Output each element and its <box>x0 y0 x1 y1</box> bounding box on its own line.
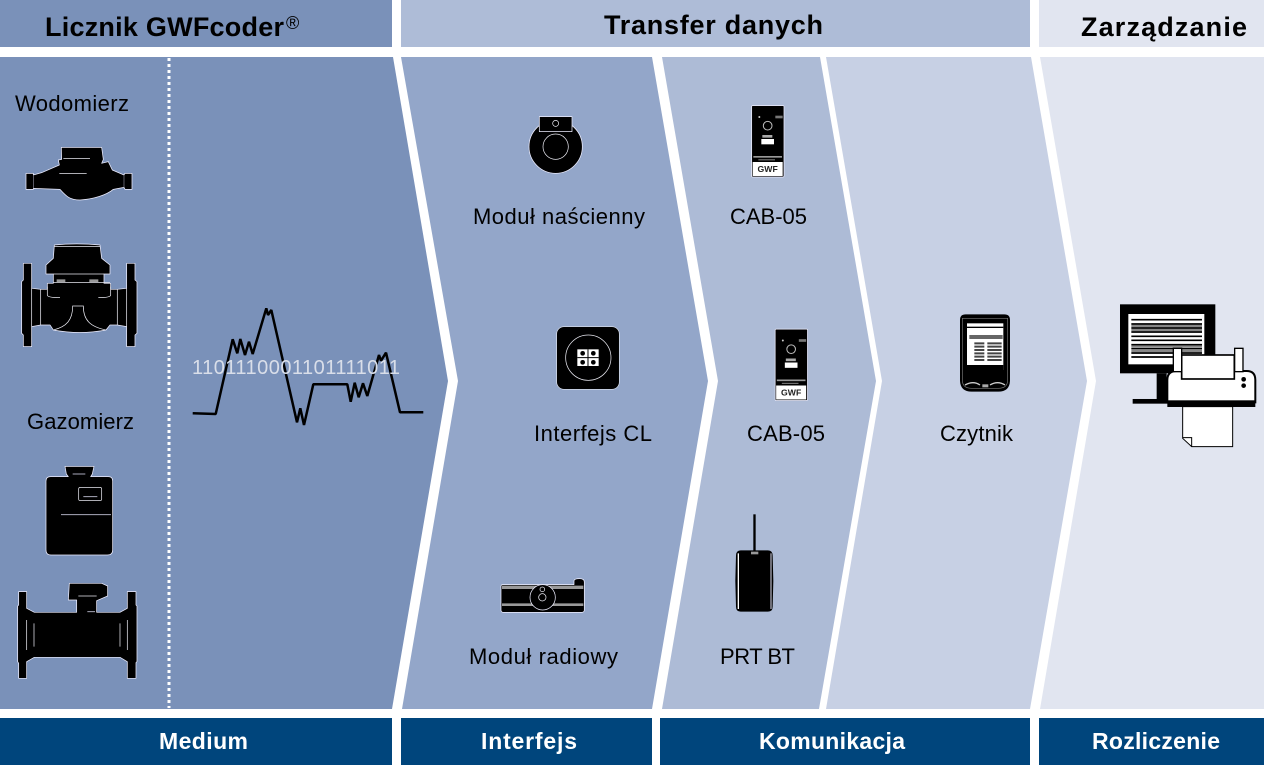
label: Interfejs CL: Interfejs CL <box>534 421 652 446</box>
header: Licznik GWFcoder: Licznik GWFcoder <box>45 12 284 42</box>
panel: medium chevron <box>0 57 448 709</box>
icon: large water meter <box>22 244 137 347</box>
icon: small water meter <box>26 147 132 200</box>
label: Moduł radiowy: Moduł radiowy <box>469 644 618 669</box>
header: Zarządzanie <box>1039 0 1264 47</box>
icon: monitor <box>1120 304 1215 404</box>
icon: CAB-05 top <box>752 106 784 177</box>
header: Licznik GWFcoder <box>0 0 392 47</box>
footer: Komunikacja <box>660 718 1030 765</box>
panel: billing chevron <box>1040 57 1264 709</box>
icon: turbine gas meter <box>18 583 137 678</box>
footer: Rozliczenie <box>1039 718 1264 765</box>
chart: digital signal line <box>193 308 423 425</box>
header: Zarządzanie: Zarządzanie <box>1081 12 1247 42</box>
panel: interface chevron <box>401 57 708 709</box>
footer: Interfejs: Interfejs <box>481 728 577 754</box>
header: Licznik GWFcoder: ® <box>286 13 299 33</box>
icon: CAB-05 top: GWF <box>758 164 778 174</box>
label: CAB-05 middle: CAB-05 <box>747 421 825 446</box>
label: Gazomierz: Gazomierz <box>27 409 134 434</box>
header: Transfer danych: Transfer danych <box>604 10 823 40</box>
icon: printer <box>1167 348 1255 447</box>
label: PRT BT: PRT BT <box>720 644 795 669</box>
icon: CAB-05 middle <box>775 329 807 400</box>
label: Czytnik: Czytnik <box>940 421 1014 446</box>
label: CAB-05 top: CAB-05 <box>730 204 807 229</box>
footer: Interfejs <box>401 718 652 765</box>
panel: reader chevron <box>826 57 1087 709</box>
icon: CAB-05 middle: GWF <box>781 387 801 397</box>
footer: Rozliczenie: Rozliczenie <box>1092 728 1220 754</box>
icon: radio module <box>501 579 584 612</box>
label: Moduł naścienny: Moduł naścienny <box>473 204 645 229</box>
header: Transfer danych <box>401 0 1030 47</box>
dotted divider <box>168 58 170 708</box>
icon: computer and printer <box>1120 304 1255 447</box>
icon: wall module <box>529 117 582 173</box>
panel: communication chevron <box>662 57 876 709</box>
footer: Komunikacja: Komunikacja <box>759 728 905 754</box>
footer: Medium <box>0 718 392 765</box>
icon: PRT BT <box>735 514 773 612</box>
label: Wodomierz: Wodomierz <box>15 91 129 116</box>
icon: handheld reader <box>960 314 1010 392</box>
footer: Medium: Medium <box>159 728 248 754</box>
icon: diaphragm gas meter <box>46 466 113 555</box>
binary data text: 1101110001101111011 <box>192 357 400 379</box>
icon: CL interface <box>557 327 619 389</box>
